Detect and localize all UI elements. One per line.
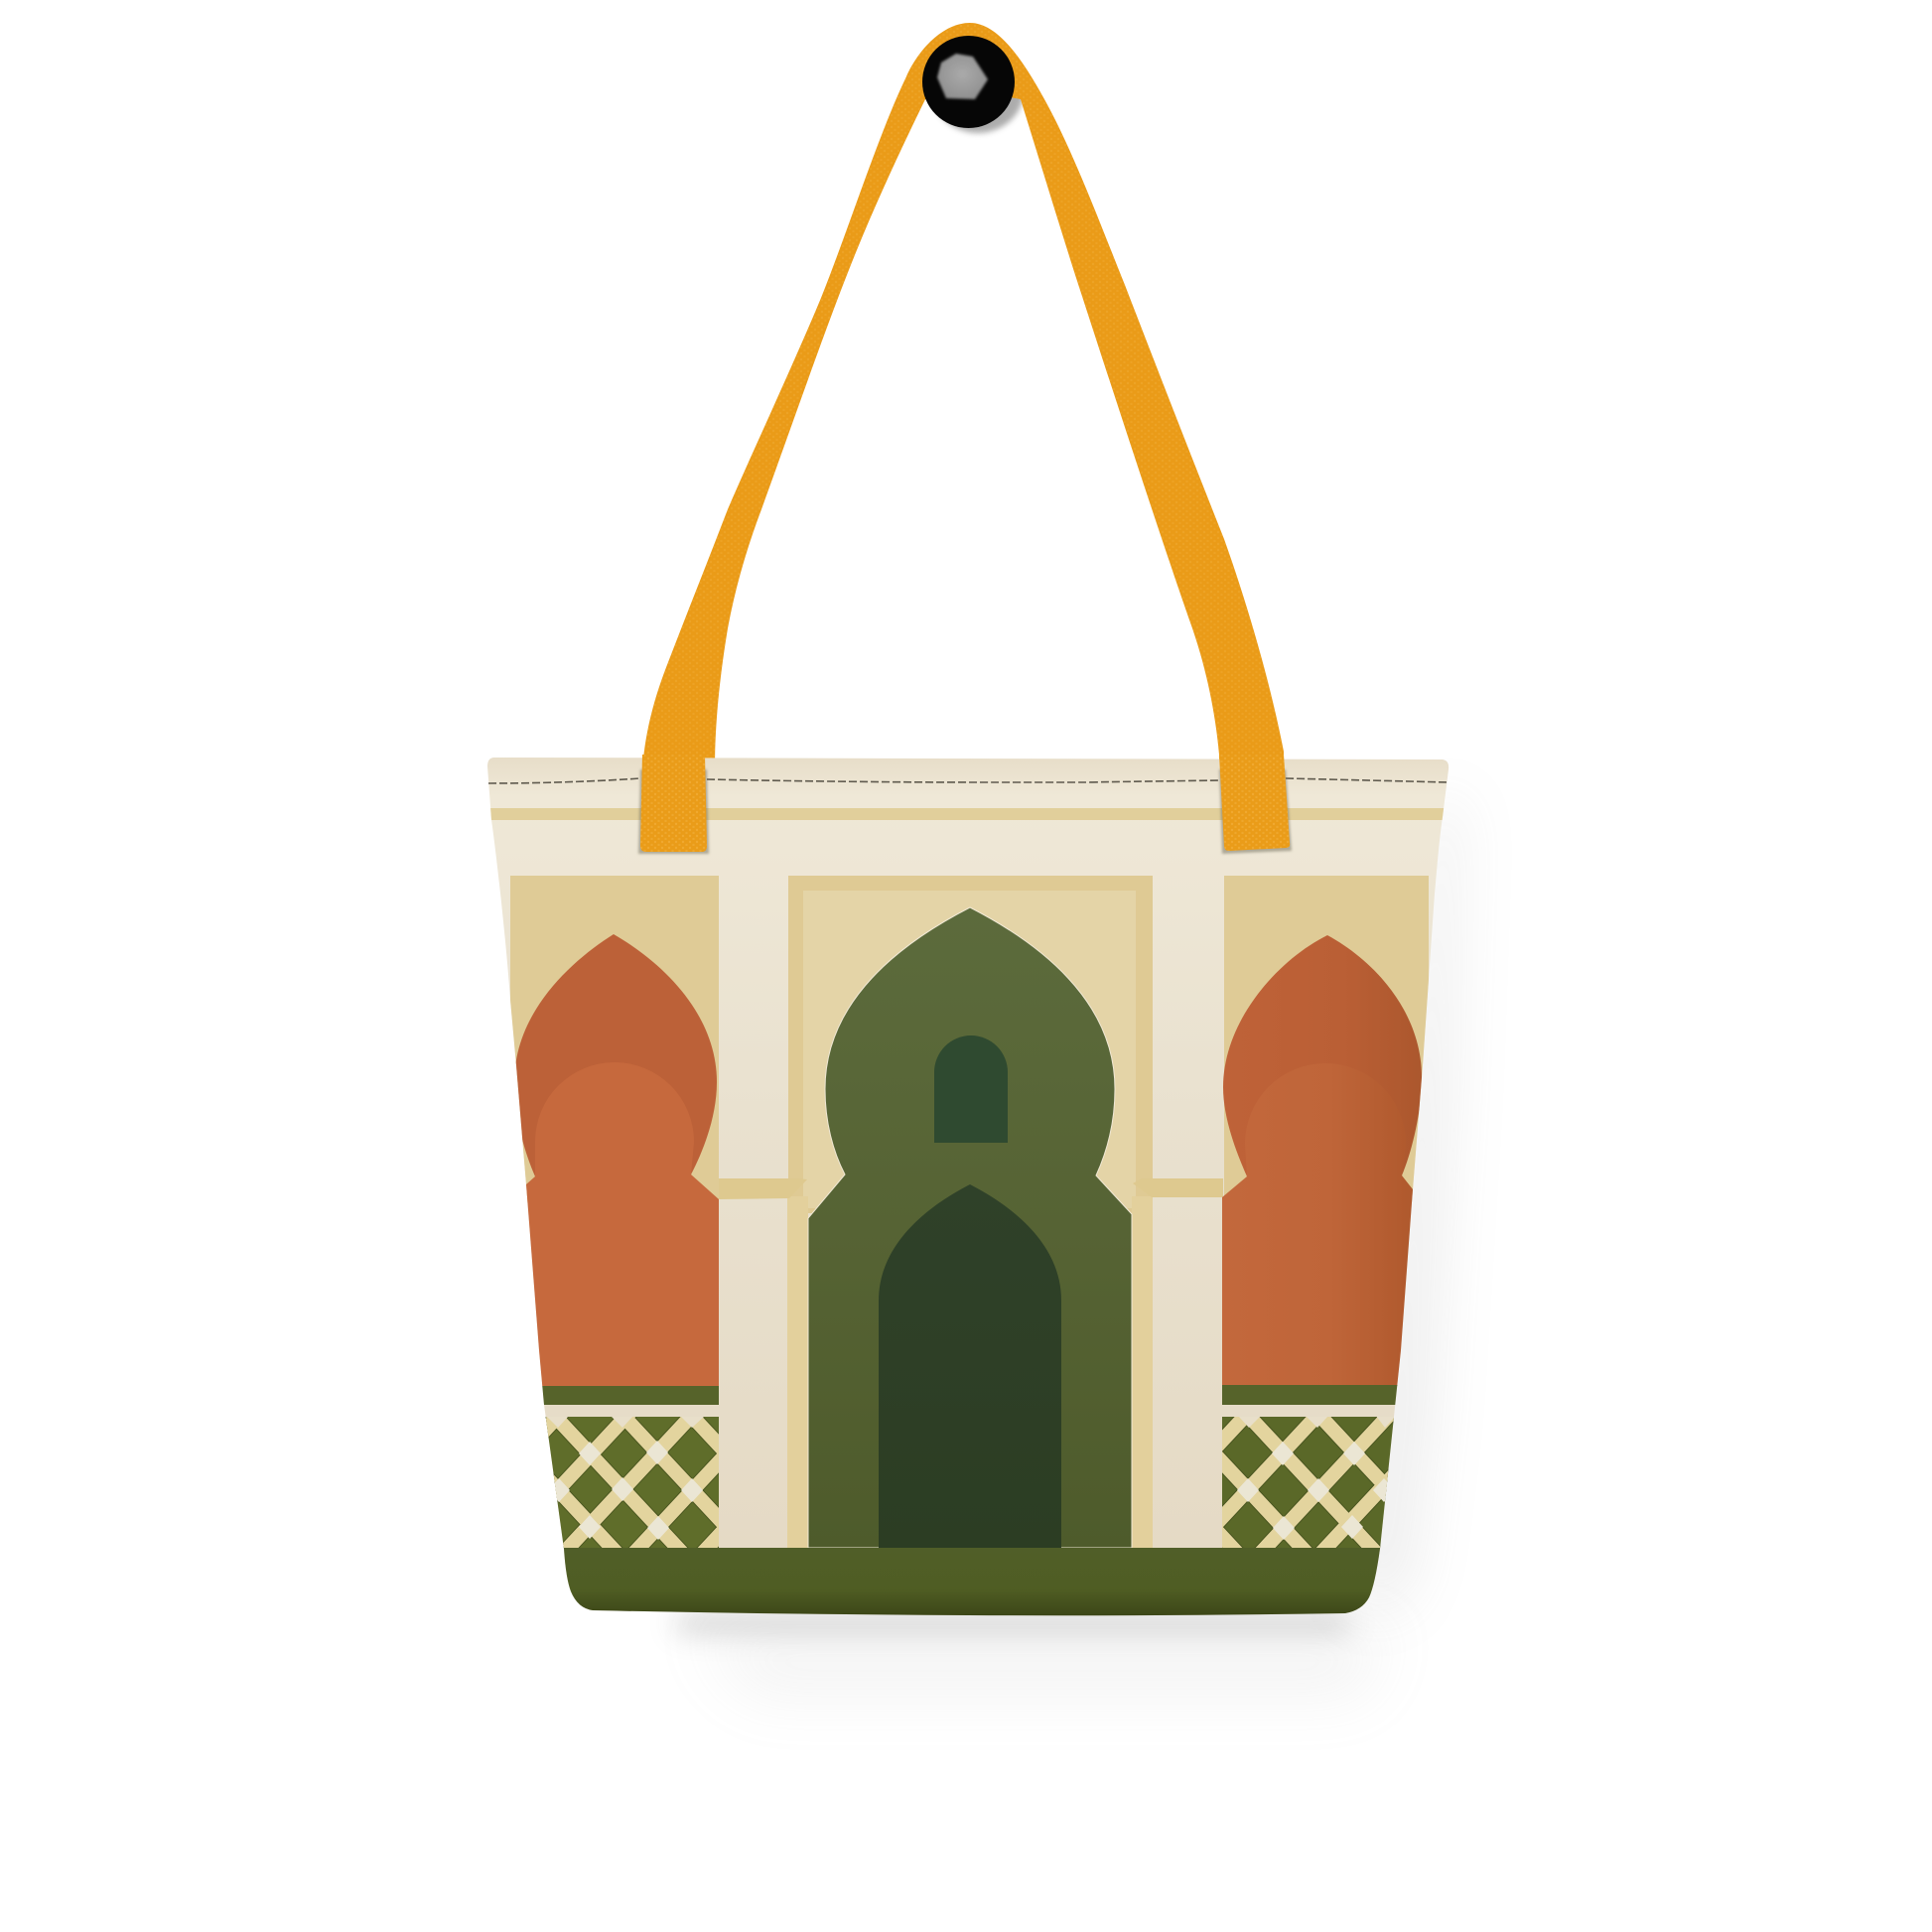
right arch: lower light orange (1222, 1175, 1413, 1386)
panel: centre niche frame (788, 876, 1153, 1213)
centre arch: green horseshoe (808, 907, 1132, 1548)
illustration: tote bag hanging on a peg (487, 23, 1449, 1672)
bag body: printed canvas (413, 750, 1459, 1623)
right arch: upper dark orange (1223, 935, 1422, 1176)
lattice top points (1239, 1417, 1394, 1428)
tan horizontal band (477, 808, 1459, 820)
cream column: left (720, 876, 788, 1178)
stitching: top hem (488, 778, 1448, 783)
left arch: upper dark orange (514, 934, 717, 1176)
peg: black knob with grey centre (922, 36, 1015, 128)
lower frame: left column and strip (787, 1196, 808, 1548)
green strip: left (542, 1386, 719, 1405)
lattice nodes (1237, 1442, 1395, 1540)
strap: looped orange handle (642, 23, 1284, 769)
base: dark olive bottom panel (536, 1548, 1410, 1617)
strap tab: left (638, 755, 709, 854)
centre arch: small window (934, 1035, 1008, 1143)
strap tab: right (1219, 755, 1292, 854)
bracket: right chamfered band (1133, 1178, 1223, 1197)
lattice: right (1222, 1417, 1394, 1548)
panel: left tan niche (510, 876, 719, 1203)
lower frame: right column and strip (1132, 1196, 1153, 1548)
left arch: lower light orange (526, 1062, 719, 1386)
shadow: under and right of bag (675, 794, 1459, 1698)
lattice nodes (548, 1441, 703, 1540)
canvas background (477, 750, 1459, 1623)
bracket: left chamfered band (719, 1178, 807, 1199)
centre arch: door (879, 1184, 1061, 1548)
green strip: right (1222, 1385, 1411, 1405)
lattice: left (546, 1417, 719, 1548)
shadow: peg (932, 50, 1024, 133)
cream column: right (1153, 876, 1224, 1178)
lattice top points (546, 1416, 705, 1428)
panel: right tan niche (1224, 876, 1429, 1203)
